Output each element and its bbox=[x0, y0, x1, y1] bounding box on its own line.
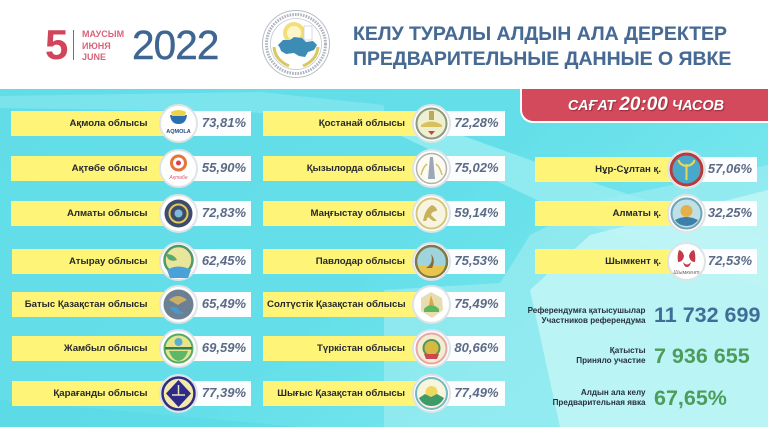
time banner bbox=[520, 89, 768, 123]
row: Батыс Қазақстан bbox=[12, 285, 251, 324]
row: Ақтөбе bbox=[11, 149, 251, 188]
row: Павлодар: 75,53% bbox=[454, 253, 498, 268]
row: Шымкент: Шымкент қ. bbox=[605, 256, 661, 267]
stat value: 11 732 699 bbox=[654, 303, 760, 327]
icon: Atyrau bbox=[159, 242, 198, 281]
icon: Turkistan bbox=[412, 329, 451, 368]
row: Қарағанды: Қарағанды облысы bbox=[53, 388, 148, 399]
row: Қызылорда: 75,02% bbox=[454, 160, 498, 175]
row: Ақмола bbox=[11, 104, 251, 143]
title: КЕЛУ ТУРАЛЫ АЛДЫН АЛА ДЕРЕКТЕР bbox=[353, 23, 727, 45]
row: Нұр-Сұлтан: 57,06% bbox=[708, 161, 752, 176]
icon: Kostanay bbox=[412, 104, 451, 143]
row: Батыс Қазақстан: 65,49% bbox=[202, 296, 246, 311]
icon: Shymkent bbox=[667, 242, 706, 281]
icon: West Kazakhstan bbox=[159, 285, 198, 324]
stat label bbox=[510, 306, 646, 326]
row: Қостанай: 72,28% bbox=[454, 115, 498, 130]
stat label: Алдын ала келу bbox=[581, 388, 646, 397]
date block bbox=[45, 21, 218, 68]
row: Алматы облысы bbox=[11, 194, 251, 233]
stat label: Референдумға қатысушылар bbox=[528, 306, 646, 315]
row: Қостанай: Қостанай облысы bbox=[319, 118, 405, 129]
row: Алматы қ.: 32,25% bbox=[708, 205, 752, 220]
icon: Zhambyl bbox=[159, 329, 198, 368]
background panel bbox=[0, 89, 768, 427]
row: Түркістан bbox=[263, 329, 505, 368]
row: Маңғыстау: Маңғыстау облысы bbox=[311, 208, 405, 219]
row: Алматы қ.: Алматы қ. bbox=[612, 208, 661, 219]
stat label: Участников референдума bbox=[542, 316, 646, 325]
row: Шымкент bbox=[535, 242, 757, 281]
row: Алматы облысы: Алматы облысы bbox=[67, 208, 148, 219]
row: Маңғыстау bbox=[263, 194, 505, 233]
row: Атырау: 62,45% bbox=[202, 253, 246, 268]
row: Жамбыл: Жамбыл облысы bbox=[64, 343, 148, 354]
row: Түркістан: Түркістан облысы bbox=[317, 343, 405, 354]
stat label: Қатысты bbox=[610, 346, 646, 355]
icon: Aqmola bbox=[159, 104, 198, 143]
row: Солтүстік Қазақстан bbox=[263, 285, 505, 324]
row: Алматы облысы: 72,83% bbox=[202, 205, 246, 220]
row: Маңғыстау: 59,14% bbox=[454, 205, 498, 220]
month labels: МАУСЫМ bbox=[82, 29, 124, 39]
row: Алматы қ. bbox=[535, 194, 757, 233]
row: Ақтөбе: 55,90% bbox=[202, 160, 246, 175]
month labels: ИЮНЯ bbox=[82, 41, 111, 51]
icon: East Kazakhstan bbox=[412, 374, 451, 413]
month labels bbox=[82, 29, 124, 62]
stat value: 7 936 655 bbox=[654, 344, 750, 368]
row: Атырау: Атырау облысы bbox=[69, 256, 148, 267]
icon: North Kazakhstan bbox=[412, 285, 451, 324]
row: Шымкент: 72,53% bbox=[708, 253, 752, 268]
time banner: САҒАТ 20:00 ЧАСОВ bbox=[568, 94, 724, 115]
row: Түркістан: 80,66% bbox=[454, 340, 498, 355]
year: 2022 bbox=[132, 22, 218, 68]
icon: Pavlodar bbox=[412, 242, 451, 281]
icon: Aktobe: Ақтөбе bbox=[168, 175, 188, 181]
row: Солтүстік Қазақстан: Солтүстік Қазақстан облысы bbox=[267, 299, 406, 310]
row: Қарағанды bbox=[12, 374, 251, 413]
row: Қостанай bbox=[263, 104, 505, 143]
stat: participants bbox=[528, 303, 760, 327]
row: Қызылорда: Қызылорда облысы bbox=[307, 163, 405, 174]
row: Шығыс Қазақстан: 77,49% bbox=[454, 385, 498, 400]
row: Нұр-Сұлтан bbox=[535, 150, 757, 189]
row: Шығыс Қазақстан: Шығыс Қазақстан облысы bbox=[277, 388, 405, 399]
icon: Aqmola: AQMOLA bbox=[166, 129, 191, 135]
row: Нұр-Сұлтан: Нұр-Сұлтан қ. bbox=[595, 164, 661, 175]
row: Батыс Қазақстан: Батыс Қазақстан облысы bbox=[25, 299, 148, 310]
title bbox=[353, 23, 731, 70]
icon: Almaty city bbox=[667, 194, 706, 233]
row: Ақмола: 73,81% bbox=[202, 115, 246, 130]
row: Шығыс Қазақстан bbox=[263, 374, 505, 413]
icon: central referendum commission emblem bbox=[262, 10, 330, 78]
row: Жамбыл bbox=[12, 329, 251, 368]
row: Солтүстік Қазақстан: 75,49% bbox=[454, 296, 498, 311]
row: Жамбыл: 69,59% bbox=[202, 340, 246, 355]
title: ПРЕДВАРИТЕЛЬНЫЕ ДАННЫЕ О ЯВКЕ bbox=[353, 48, 731, 70]
stat label bbox=[510, 346, 646, 366]
date divider bbox=[73, 30, 74, 60]
stat label: Приняло участие bbox=[576, 356, 646, 365]
stat: preliminary turnout bbox=[510, 383, 764, 413]
row: Атырау bbox=[12, 242, 251, 281]
row: Павлодар: Павлодар облысы bbox=[316, 256, 405, 267]
icon: Shymkent: Шымкент bbox=[673, 270, 700, 276]
icon: Mangystau bbox=[412, 194, 451, 233]
row: Қызылорда bbox=[263, 149, 505, 188]
stat label: Предварительная явка bbox=[553, 398, 646, 407]
stat label bbox=[510, 388, 646, 408]
icon: Nur-Sultan bbox=[667, 150, 706, 189]
icon: Kyzylorda bbox=[412, 149, 451, 188]
icon: Almaty region bbox=[159, 194, 198, 233]
row: Павлодар bbox=[263, 242, 505, 281]
icon: Aktobe bbox=[159, 149, 198, 188]
row: Ақмола: Ақмола облысы bbox=[69, 118, 148, 129]
date number: 5 bbox=[45, 21, 68, 68]
icon: Karaganda bbox=[159, 374, 198, 413]
row: Қарағанды: 77,39% bbox=[202, 385, 246, 400]
month labels: JUNE bbox=[82, 52, 106, 62]
row: Ақтөбе: Ақтөбе облысы bbox=[72, 163, 148, 174]
stat value: 67,65% bbox=[654, 386, 727, 410]
stat: took part bbox=[510, 341, 764, 371]
